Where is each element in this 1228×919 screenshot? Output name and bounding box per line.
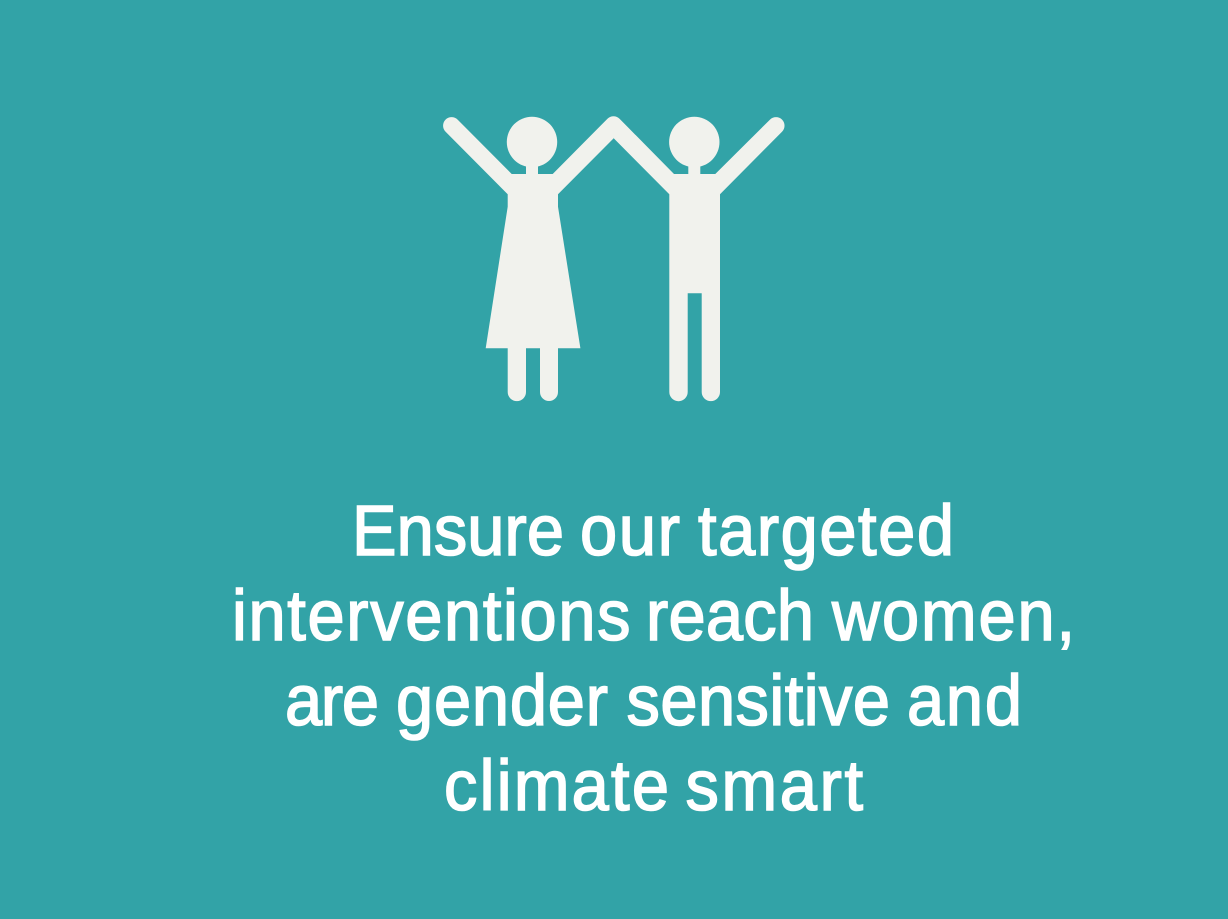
caption text: women, (831, 576, 1075, 655)
caption text: reach (646, 576, 814, 655)
caption text: sensitive (627, 661, 890, 740)
icon: woman and man holding hands up (443, 116, 785, 401)
caption text: gender (396, 661, 608, 740)
caption text: interventions (232, 576, 631, 655)
caption text: smart (686, 746, 863, 825)
man figure (611, 117, 785, 401)
caption text: Ensure (352, 491, 564, 570)
caption text (232, 491, 1075, 825)
caption text: our (580, 491, 680, 570)
woman figure (443, 116, 619, 401)
caption text: climate (444, 746, 669, 825)
caption text: and (907, 661, 1022, 740)
caption text: targeted (698, 491, 954, 570)
caption text: are (285, 661, 379, 740)
